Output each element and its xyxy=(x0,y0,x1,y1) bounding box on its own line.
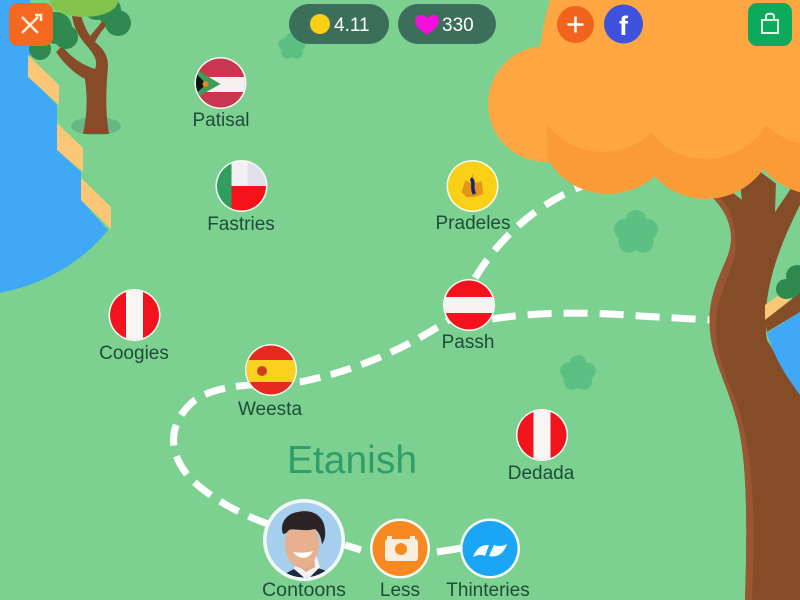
marker: Dedada xyxy=(508,409,575,484)
button: shop bag xyxy=(748,3,792,46)
marker: Patisal xyxy=(194,57,248,126)
marker: Weesta: Weesta xyxy=(238,399,302,420)
marker: Pradeles xyxy=(436,160,510,234)
HUD: heart counter xyxy=(398,4,496,44)
marker: Coogies xyxy=(99,289,169,364)
button: close tools xyxy=(9,3,53,46)
marker: Patisal: Patisal xyxy=(192,110,250,131)
button: facebook: f xyxy=(619,11,629,41)
marker: Less camera xyxy=(370,518,430,600)
marker: Contoons portrait xyxy=(262,499,346,600)
dashed route xyxy=(174,183,712,552)
marker: Thinteries xyxy=(446,518,530,600)
left tree xyxy=(29,0,131,135)
HUD: heart counter: 330 xyxy=(442,15,474,36)
HUD: coin counter xyxy=(289,4,389,44)
marker: Weesta xyxy=(238,344,302,420)
region title: Etanish xyxy=(287,439,417,482)
marker: Fastries: Fastries xyxy=(207,214,275,235)
button: facebook xyxy=(604,4,643,44)
marker: Fastries xyxy=(207,160,275,235)
marker: Coogies: Coogies xyxy=(99,343,169,364)
lake: left water with beach xyxy=(0,0,111,293)
marker: Dedada: Dedada xyxy=(508,463,575,484)
marker: Pradeles: Pradeles xyxy=(436,213,510,234)
decorative clovers xyxy=(278,32,658,390)
right tree xyxy=(709,170,800,600)
button: plus xyxy=(557,6,594,43)
marker: Passh xyxy=(442,279,495,353)
HUD: coin counter: 4.11 xyxy=(334,15,370,36)
tree canopy: orange foliage xyxy=(488,0,800,199)
marker: Passh: Passh xyxy=(442,332,494,353)
